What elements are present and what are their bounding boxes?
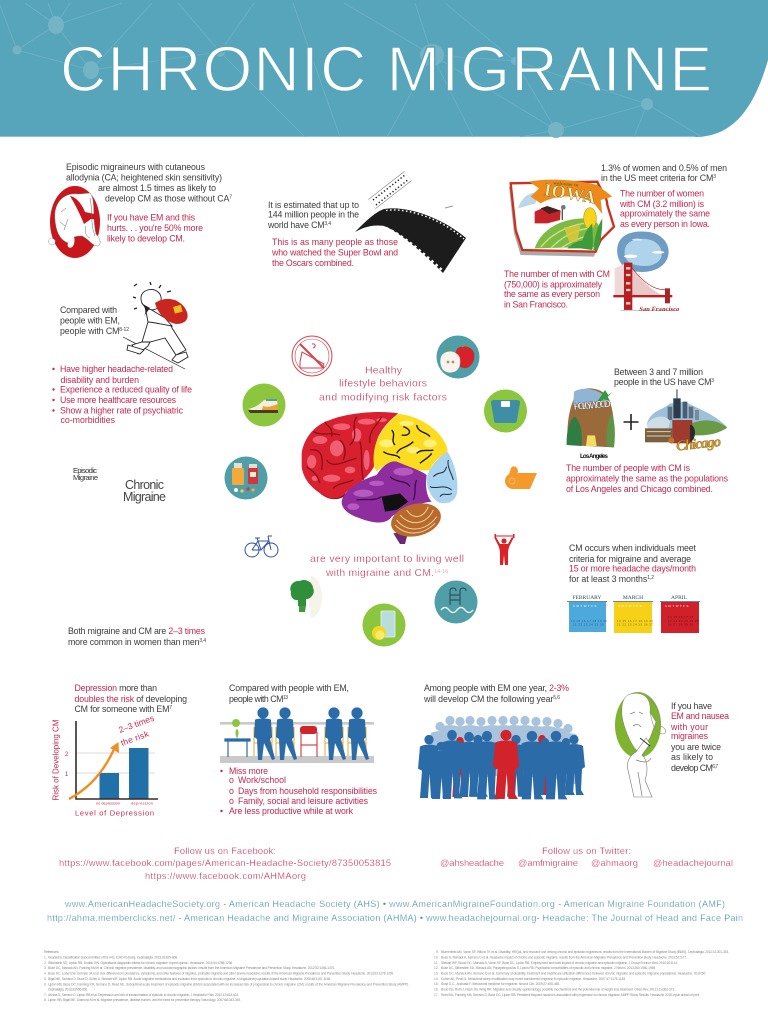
references: right column: 15. xyxy=(434,982,439,986)
social links: Twitter: @amfmigraine xyxy=(518,858,578,868)
references: left column: 4. xyxy=(44,972,47,976)
text: definition: 15 or more headache days/month xyxy=(569,564,696,574)
text: US percentages xyxy=(601,163,727,183)
references: left column: 1. xyxy=(44,956,47,960)
list: missed activities xyxy=(220,766,378,816)
social links: Twitter xyxy=(440,846,733,868)
text: healthy lifestyle behaviors: and modifying risk factors xyxy=(319,392,447,404)
list: missed activities: o xyxy=(229,775,234,785)
text: men comparison: The number of men with CM xyxy=(504,269,610,279)
title: CHRONIC MIGRAINE xyxy=(60,33,712,105)
references: right column: 9. xyxy=(436,950,439,954)
text: sex difference: more common in women than men xyxy=(68,637,199,647)
bar chart: risk by depression level: depression xyxy=(131,802,153,806)
label: chronic migraine: Migraine xyxy=(123,490,166,504)
text: allodynia statistic xyxy=(66,162,232,204)
organisation websites: www.AmericanHeadacheSociety.org - American Headache Society (AHS) • www.AmericanMigraineFoundation.org - American Migraine Foundation (AMF) xyxy=(64,899,725,909)
text: compared with EM: 8-12 xyxy=(119,327,129,333)
icon: yoga mat xyxy=(505,466,537,489)
references: left column: Cephalalgia. 2013;33:956-992. xyxy=(48,987,88,991)
panel: definition of chronic migraine xyxy=(567,543,700,633)
list: missed activities: Miss more xyxy=(229,766,268,776)
panel: cutaneous allodynia xyxy=(48,162,232,258)
text: progression rate xyxy=(423,683,569,704)
text: depression statement xyxy=(74,683,187,714)
icon: April calendar: SMTWTFS xyxy=(665,604,690,608)
icon: February calendar: FEBRUARY xyxy=(572,595,602,601)
list: missed activities: Work/school xyxy=(238,775,286,785)
panel: nausea xyxy=(615,692,729,797)
references: right column: Stewart WF, Wood GC, Manack A, Varon SF, Buse DC, Lipton RB. Employment and work impact of chronic migraine and episodic migraine. J Occup Environ Med. 2010;52:8-14. xyxy=(441,961,678,965)
text: men comparison: in San Francisco. xyxy=(504,300,568,310)
text: compared with EM xyxy=(229,683,349,704)
text: US percentages: in the US meet criteria for CM xyxy=(601,173,713,183)
icon: hiker with backpack xyxy=(123,282,188,369)
text: importance of living well xyxy=(310,554,464,579)
references: right column: 12. xyxy=(434,966,439,970)
text: prevalence worldwide: It is estimated that up to xyxy=(268,200,359,210)
text: super bowl comparison xyxy=(271,237,398,268)
text: compared with EM: people with EM, xyxy=(60,316,120,326)
icon: March calendar: MARCH xyxy=(623,595,643,601)
text: US prevalence range: 3 xyxy=(711,378,714,384)
text: depression statement: Depression more than xyxy=(74,683,157,693)
icon: bicycle xyxy=(245,536,278,557)
text: men comparison: (750,000) is approximately xyxy=(504,279,603,289)
bar chart: risk by depression level: Level of Depression xyxy=(75,808,154,818)
text: LA and Chicago comparison: of Los Angeles and Chicago combined. xyxy=(566,484,713,494)
text: compared with EM: Compared with xyxy=(60,305,117,315)
references: right column xyxy=(434,950,729,997)
text: importance of living well: with migraine and CM. xyxy=(326,568,434,579)
text: nausea statistic: as likely to xyxy=(671,752,713,762)
references: left column: Ashina S, Serrano D, Lipton RB et al. Depression and risk of transformation of episodic to chronic migraine. J Headache Pain. 2012;13:615-624. xyxy=(48,993,239,997)
text: prevalence worldwide xyxy=(267,200,359,230)
icon: lemon water xyxy=(362,604,406,646)
icon: Los Angeles Hollywood sign: HOLLYWOOD xyxy=(573,399,611,413)
social links: Twitter: @ahsheadache xyxy=(440,858,504,868)
text: nausea statistic: you are twice xyxy=(671,742,721,752)
text: men comparison: the same as every person xyxy=(504,289,600,299)
references: right column: Buse DC, Manack AN, Serrano D et al. Summary of disability, treatment and healthcare utilization differences between chronic migraine and episodic migraine populations. Headache. 2010;50: xyxy=(441,972,706,976)
references: left column: References: xyxy=(44,950,59,954)
text: Los Angeles caption: Los Angeles xyxy=(580,453,609,460)
list: burden outcomes: Use more healthcare resources xyxy=(60,395,177,405)
icon: February calendar: 14 15 16 17 18 19 20 xyxy=(571,619,607,623)
panel: lifestyle wheel xyxy=(224,336,537,646)
panel: missed activities xyxy=(220,683,378,816)
text: importance of living well: 14-16 xyxy=(434,569,448,575)
text: definition: CM occurs when individuals meet xyxy=(569,543,697,553)
references: right column: Cutrer AK, Pearl S. Behavioral sleep modification may revert transformed migraine to episodic migraine. Headache. 2007;47:1178-1183. xyxy=(441,977,626,981)
text: importance of living well: are very important to living well xyxy=(310,554,464,565)
list: burden outcomes: Show a higher rate of psychiatric xyxy=(60,406,184,416)
text: nausea statistic: migraines xyxy=(671,731,709,741)
icon: April calendar xyxy=(660,595,700,633)
text: women comparison xyxy=(619,188,710,229)
references: left column xyxy=(44,950,409,1002)
references: left column: 8. xyxy=(44,998,47,1002)
text: LA and Chicago comparison xyxy=(566,463,729,494)
social links: Facebook xyxy=(59,846,391,881)
list: burden outcomes: Experience a reduced quality of life xyxy=(60,384,192,394)
text: allodynia takeaway: hurts. . . you're 50% more xyxy=(107,223,203,233)
bar chart: risk by depression level: 2 xyxy=(65,752,69,758)
references: left column: Lipton RB, Buse DC, Fanning KM, Serrano D, Reed ML. Suboptimal acute treatment of episodic migraine (EM) is associated with an increased risk of progression to chronic migraine (CM): results of the American Migraine Prevalence and Prevention Study (AMPP). xyxy=(48,982,409,986)
references: right column: 14. xyxy=(434,977,439,981)
bar chart: risk by depression level: Risk of Developing CM xyxy=(52,719,60,800)
references: right column: 17. xyxy=(434,993,439,997)
text: nausea statistic: EM and nausea xyxy=(671,711,729,721)
panel: 144 million xyxy=(267,175,466,273)
list: burden outcomes: co-morbidities xyxy=(60,415,116,425)
icon: no smoking xyxy=(292,336,332,376)
social links: Facebook: https://www.facebook.com/pages/American-Headache-Society/87350053815 xyxy=(59,858,391,868)
organisation websites xyxy=(47,899,743,923)
references: left column: 3. xyxy=(44,966,47,970)
text: compared with EM: Compared with people with EM, xyxy=(229,683,349,693)
references: right column: 11. xyxy=(434,961,438,965)
icon: walking shoe xyxy=(242,384,286,426)
text: allodynia statistic: 7 xyxy=(229,194,232,200)
references: right column: Bond DS, Roth J, Nash JM, Wing RR. Migraine and obesity: epidemiology, possible mechanisms and the potential role of weight loss treatment. Obes Rev. 2011;12:e362-371. xyxy=(441,987,675,991)
icon: April calendar: 14 15 16 17 18 xyxy=(668,615,694,619)
text: compared with EM: people with CM xyxy=(229,694,283,704)
icon: Chicago skyline xyxy=(645,389,727,455)
icon: Iowa badge: welcome to xyxy=(553,181,579,188)
label: chronic migraine: Chronic xyxy=(125,478,164,492)
text: definition: criteria for migraine and average xyxy=(569,554,691,564)
references: left column: 2. xyxy=(44,961,47,965)
text: allodynia takeaway: likely to develop CM. xyxy=(107,234,185,244)
icon: February calendar xyxy=(567,595,607,632)
bar chart: risk by depression level: 1 xyxy=(65,772,69,778)
references: right column: Blumenfeld AM, Varon SF, Wilcox TK et al. Disability, HRQoL and resource use among chronic and episodic migraineurs: results from the International Burden of Migraine Study (IBMS). Cephalalgia. 2011;31:301-315. xyxy=(441,950,729,954)
text: progression rate: Among people with EM one year, 2-3% xyxy=(424,683,569,693)
icon: April calendar: 20 21 22 23 24 25 xyxy=(668,619,699,623)
text: compared with EM xyxy=(60,305,129,336)
text: nausea statistic: with your xyxy=(670,722,708,732)
text: men comparison xyxy=(504,269,610,310)
icon: February calendar: 21 22 23 24 25 26 xyxy=(573,622,604,626)
references: right column: Buse D, Manack A, Serrano D et al. Headache impact of chronic and episodic migraine: results from the American Migraine Prevalence and Prevention study. Headache. 2012;52:3-17. xyxy=(441,956,687,960)
illustration: coloured brain xyxy=(302,412,457,544)
icon: person lifting weights xyxy=(494,534,514,565)
bar chart: risk by depression level: no depression xyxy=(96,802,120,806)
panel: depression risk xyxy=(52,683,187,818)
references: right column: 13. xyxy=(434,972,439,976)
text: depression statement: 7 xyxy=(169,705,172,711)
text: prevalence worldwide: 144 million people in the xyxy=(268,210,359,220)
icon: April calendar: 26 27 28 29 30 xyxy=(668,622,694,626)
text: nausea statistic: If you have xyxy=(671,701,712,711)
references: left column: 5. xyxy=(44,977,47,981)
list: missed activities: Family, social and leisure activities xyxy=(238,796,369,806)
text: US prevalence range xyxy=(614,367,714,387)
icon: film strip xyxy=(355,175,466,273)
icon: March calendar: 14 15 16 17 18 19 20 xyxy=(617,619,653,623)
text: allodynia statistic: develop CM as those without CA xyxy=(105,194,229,204)
label: episodic migraine: Episodic xyxy=(73,466,97,475)
icon: March calendar: 21 22 23 24 25 26 27 xyxy=(617,622,653,626)
text: US prevalence range: Between 3 and 7 million xyxy=(614,367,703,377)
references: left column: Buse DC, Manack AN, Fanning KM et al. Chronic migraine prevalence, disability, and sociodemographic factors: results from the American Migraine Prevalence and Prevention Study. Headache. 2012;52:1456-1470. xyxy=(48,966,335,970)
text: US prevalence range: people in the US have CM xyxy=(614,377,711,387)
organisation websites: http://ahma.memberclicks.net/ - American Headache and Migraine Association (AHMA) • www.headachejournal.org- Headache: The Journal of Head and Face Pain xyxy=(47,913,743,923)
icon: Golden Gate Bridge xyxy=(613,232,679,310)
text: super bowl comparison: This is as many people as those xyxy=(272,237,398,247)
text: definition: for at least 3 months xyxy=(569,574,647,584)
text: prevalence worldwide: 3,4 xyxy=(324,221,331,227)
text: super bowl comparison: the Oscars combined. xyxy=(272,258,354,268)
illustration: crowd with red figures xyxy=(418,716,585,799)
references: right column: 10. xyxy=(434,956,439,960)
text: allodynia statistic: are almost 1.5 times as likely to xyxy=(98,183,216,193)
bar chart: risk by depression level: 2–3 times xyxy=(117,713,155,735)
list: burden outcomes: Have higher headache-related xyxy=(60,364,173,374)
text: nausea statistic: develop CM xyxy=(671,763,713,773)
icon: Iowa badge: IOWA xyxy=(543,179,597,207)
list: burden outcomes: disability and burden xyxy=(60,375,139,385)
text: allodynia takeaway xyxy=(107,212,203,244)
text: healthy lifestyle behaviors: lifestyle behaviors xyxy=(339,378,427,390)
icon: plus sign xyxy=(624,414,638,430)
panel: Los Angeles and Chicago xyxy=(566,367,729,494)
text: women comparison: with CM (3.2 million) is xyxy=(619,199,705,209)
bar chart: risk by depression level xyxy=(52,713,158,818)
list: missed activities: Days from household responsibilities xyxy=(238,786,378,796)
text: depression statement: CM for someone with EM xyxy=(74,704,169,714)
text: US percentages: 1.3% of women and 0.5% of men xyxy=(601,163,727,173)
label: episodic migraine xyxy=(73,466,98,482)
icon: swimming pool xyxy=(434,580,478,624)
text: healthy lifestyle behaviors xyxy=(319,366,447,404)
list: missed activities: Are less productive while at work xyxy=(229,806,354,816)
references: right column: 16. xyxy=(434,987,439,991)
icon: February calendar: SMTWTFS xyxy=(573,604,598,608)
references: left column: 6. xyxy=(44,982,47,986)
text: San Francisco caption: San Francisco xyxy=(638,306,681,313)
references: left column: Bigal ME, Serrano D, Buse D, Scher A, Stewart WF, Lipton RB. Acute migraine medications and evolution from episodic to chronic migraine: a longitudinal population-based study. Headache. 2008;48:1157-1168. xyxy=(48,977,331,981)
icon: weighing scale xyxy=(484,390,527,432)
text: nausea statistic xyxy=(670,701,729,773)
icon: March calendar xyxy=(613,595,653,633)
text: compared with EM: 13 xyxy=(283,695,288,701)
text: healthy lifestyle behaviors: Healthy xyxy=(365,366,403,376)
icon: Chicago skyline: Chicago xyxy=(675,434,722,455)
text: women comparison: The number of women xyxy=(620,188,704,198)
social links: Twitter: Follow us on Twitter: xyxy=(542,846,631,856)
icon: March calendar: SMTWTFS xyxy=(618,604,643,608)
illustration: woman with nausea xyxy=(615,692,666,797)
label: chronic migraine xyxy=(123,478,166,504)
panel: annual progression xyxy=(418,683,585,799)
text: compared with EM: people with CM xyxy=(60,326,119,336)
social links: Twitter: @ahmaorg xyxy=(591,858,638,868)
icon: Los Angeles Hollywood sign xyxy=(567,388,615,447)
header banner xyxy=(0,0,768,138)
text: allodynia statistic: Episodic migraineurs with cutaneous xyxy=(66,162,206,172)
text: nausea statistic: 6,7 xyxy=(712,764,718,770)
icon: woman with headache in red oval xyxy=(48,186,100,258)
social links: Facebook: Follow us on Facebook: xyxy=(174,846,276,856)
references: right column: Buse D.C., Andrasik F. Behavioral medicine for migraine. Neurol Clin. 2009;27:455-465. xyxy=(441,982,560,986)
text: depression statement: doubles the risk of developing xyxy=(74,694,187,704)
text: progression rate: will develop CM the following year xyxy=(424,694,553,704)
text: LA and Chicago comparison: approximately the same as the populations xyxy=(566,474,729,484)
text: prevalence worldwide: world have CM xyxy=(268,220,325,230)
text: progression rate: 5,6 xyxy=(553,695,560,701)
icon: broccoli xyxy=(290,576,322,618)
text: definition: 1,2 xyxy=(647,575,654,581)
social links: Twitter: @headachejournal xyxy=(653,858,733,868)
icon: apples xyxy=(436,336,480,378)
text: definition xyxy=(569,543,697,584)
social links: Facebook: https://www.facebook.com/AHMAorg xyxy=(145,871,306,881)
icon: April calendar: APRIL xyxy=(671,595,688,601)
icon: medication bottles xyxy=(224,456,268,500)
bar chart: risk by depression level: the risk xyxy=(119,728,151,748)
icon: Iowa badge xyxy=(509,179,614,257)
panel: Iowa and San Francisco xyxy=(504,163,727,313)
references: right column: Buse DC, Silberstein SD, Manack AN, Papapetropoulos S, Lipton RB. Psychiatric comorbidities of episodic and chronic migraine. J Neurol. 2013;260:1960-1969. xyxy=(441,966,656,970)
text: super bowl comparison: who watched the Super Bowl and xyxy=(271,248,398,258)
text: sex difference: Both migraine and CM are 2–3 times xyxy=(68,626,206,636)
text: women comparison: as every person in Iowa. xyxy=(620,219,710,229)
references: left column: Buse DC, Loder EW, Gorman JA et al. Sex differences in prevalence, symptoms, and other features of migraine, probable migraine and other severe headache: results of the American Migraine Prevalence and Prevention Study. Headache. 2013;53:1278-1299. xyxy=(48,972,394,976)
label: episodic migraine: Migraine xyxy=(73,473,98,482)
list: missed activities: o xyxy=(229,786,234,796)
text: allodynia statistic: allodynia (CA; heightened skin sensitivity) xyxy=(66,172,222,182)
references: right column: Reed ML, Fanning KM, Serrano D, Buse DC, Lipton RB. Persistent frequent nausea is associated with progression to chronic migraine: AMPP Study Results. Headache 2015, epub ahead of print. xyxy=(441,993,700,997)
references: left column: Headache Classification Subcommittee of the IHS. ICHD-III (beta). Cephalalgia. 2013;33:629-808. xyxy=(48,956,178,960)
text: US percentages: 3 xyxy=(713,174,716,180)
text: LA and Chicago comparison: The number of people with CM is xyxy=(566,463,691,473)
references: left column: 7. xyxy=(44,993,47,997)
list: burden outcomes xyxy=(52,364,192,425)
illustration: waiting room xyxy=(220,707,374,763)
references: left column: Lipton RB, Bigal ME, Diamond M et al. Migraine prevalence, disease burden, and the need for preventive therapy. Neurology. 2007;68:343-349. xyxy=(48,998,241,1002)
text: women comparison: approximately the same xyxy=(620,208,710,218)
references: left column: Silberstein SD, Lipton RB, Dodick DW. Operational diagnostic criteria for chronic migraine: expert opinion. Headache. 2014;54:1258-1266. xyxy=(48,961,233,965)
list: missed activities: o xyxy=(229,796,234,806)
text: sex difference: 3,4 xyxy=(199,638,206,644)
text: sex difference xyxy=(68,626,206,647)
panel: comparison with EM and hiker xyxy=(52,282,192,425)
text: allodynia takeaway: If you have EM and this xyxy=(107,212,196,222)
